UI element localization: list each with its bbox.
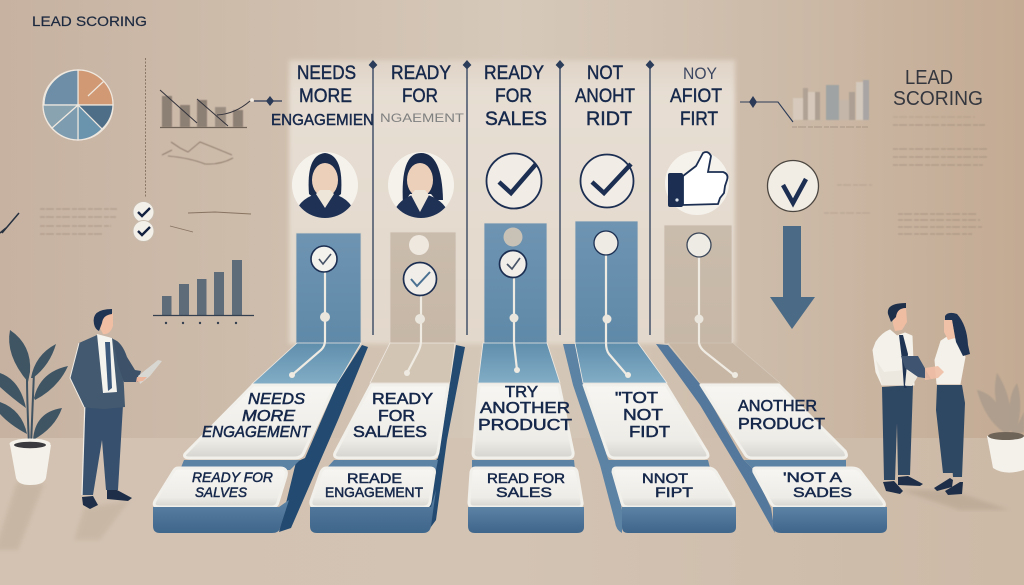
lane 2 slider: [404, 235, 436, 376]
lane 3 lower label: READ FOR: [487, 470, 565, 486]
plant: left: [0, 330, 68, 550]
column 3 heading: READY: [484, 63, 544, 84]
squiggle lines: [162, 142, 233, 164]
lane 1 slider: [289, 246, 337, 378]
lane 1 lower label: [192, 469, 273, 500]
lane 5 upper label: PRODUCT: [738, 416, 825, 433]
lane 1 lower label: READY FOR: [192, 469, 273, 485]
lane 4 upper label: NOT: [623, 407, 663, 424]
panel: lane 1: [153, 233, 368, 533]
down arrow: [770, 226, 815, 329]
lane 3 slider: [500, 228, 526, 373]
column 1 heading: ENGAGEMIEN: [271, 112, 374, 129]
lane 1 upper label: [202, 391, 311, 441]
column 1 heading: MORE: [299, 86, 352, 107]
lane 2 upper label: [353, 391, 433, 441]
lane 3 upper label: ANOTHER: [480, 400, 570, 417]
lane 4 lower label: [642, 470, 694, 500]
small stroke marks: [170, 212, 251, 232]
lane 1 upper label: ENGAGEMENT: [202, 424, 311, 441]
lane 3 upper label: [478, 384, 572, 434]
column 5 heading: FIRT: [680, 109, 718, 130]
lane 4 lower label: FIPT: [655, 484, 694, 500]
left checkmark: [0, 213, 19, 233]
lane 1 upper label: NEEDS: [248, 391, 305, 408]
pie chart: [43, 70, 113, 140]
lane 4 lower label: NNOT: [642, 470, 689, 486]
right title: SCORING: [893, 88, 983, 110]
person: man with tablet: [70, 309, 162, 540]
left fuzzy text block: [40, 209, 117, 234]
column 2 heading: READY: [391, 63, 451, 84]
column 2 heading: FOR: [402, 86, 438, 107]
column 4 heading: NOT: [587, 63, 623, 84]
column 5 heading: NOY: [683, 64, 717, 83]
lane 2 lower label: READE: [347, 470, 402, 486]
lane 5 upper label: [738, 398, 825, 433]
column 2 heading: NGAEMENT: [380, 111, 465, 125]
lane 2 lower label: [325, 470, 423, 500]
lane 3 lower label: SALES: [496, 484, 552, 500]
woman: [936, 385, 965, 477]
panel: lane 3: [468, 223, 584, 533]
avatar: woman 1: [292, 152, 358, 220]
icon: right check circle: [768, 160, 818, 212]
lane 4 upper label: "TOT: [615, 390, 658, 407]
right mini chart: [740, 80, 869, 127]
column 1 heading: [271, 63, 374, 129]
plant: right: [977, 373, 1024, 473]
right title: LEAD: [905, 67, 953, 89]
top left bar and line chart: [160, 90, 282, 128]
man: [882, 385, 913, 480]
column 4 heading: [575, 63, 635, 130]
lane 2 upper label: SAL/EES: [353, 424, 427, 441]
column 2 heading: [380, 63, 465, 125]
lane 5 lower label: [783, 469, 852, 500]
lane 5 slider: [687, 233, 738, 378]
lane 4 slider: [594, 231, 631, 378]
lane 1 lower label: SALVES: [195, 484, 248, 500]
floor: [0, 438, 1024, 585]
icon: check circle 3: [486, 154, 542, 208]
panel: lane 5: [656, 225, 887, 533]
lane 5 upper label: ANOTHER: [738, 398, 817, 415]
column 5 heading: [670, 64, 722, 130]
icon: thumbs up: [665, 151, 729, 215]
lane 1 upper label: MORE: [242, 408, 295, 425]
lane 4 upper label: FIDT: [629, 424, 670, 441]
panel: lane 4: [563, 221, 736, 533]
lane 2 upper label: FOR: [378, 408, 415, 425]
check badges: [133, 202, 154, 242]
column 4 heading: RIDT: [586, 109, 632, 130]
lower left bar chart: [153, 260, 254, 324]
column 4 heading: ANOHT: [575, 86, 635, 107]
column 3 heading: FOR: [495, 86, 532, 107]
icon: check circle 4: [580, 154, 634, 208]
lane 3 lower label: [487, 470, 565, 500]
lane 2 lower label: ENGAGEMENT: [325, 484, 423, 500]
column 5 heading: AFIOT: [670, 86, 722, 107]
lane 5 lower label: SADES: [793, 484, 852, 500]
wall background: [0, 0, 1024, 438]
shared tablet: [901, 356, 931, 379]
column 1 heading: NEEDS: [297, 63, 356, 84]
right fuzzy text blocks: [824, 117, 988, 234]
lane 4 upper label: [615, 390, 670, 441]
avatar: woman 2: [388, 152, 454, 220]
lane 2 upper label: READY: [372, 391, 433, 408]
people: man and woman with tablet: [873, 303, 1010, 510]
dashed divider: [144, 58, 146, 198]
panel: lane 2: [310, 232, 465, 533]
lane 3 upper label: PRODUCT: [478, 417, 572, 434]
right title: [893, 67, 983, 110]
column 3 heading: SALES: [485, 109, 547, 130]
lane 5 lower label: 'NOT A: [783, 469, 843, 485]
top left title: LEAD SCORING: [32, 13, 147, 29]
column 3 heading: [484, 63, 547, 130]
lane 3 upper label: TRY: [505, 384, 538, 401]
column separators: [370, 61, 654, 335]
panel: column backdrop: [289, 60, 735, 344]
